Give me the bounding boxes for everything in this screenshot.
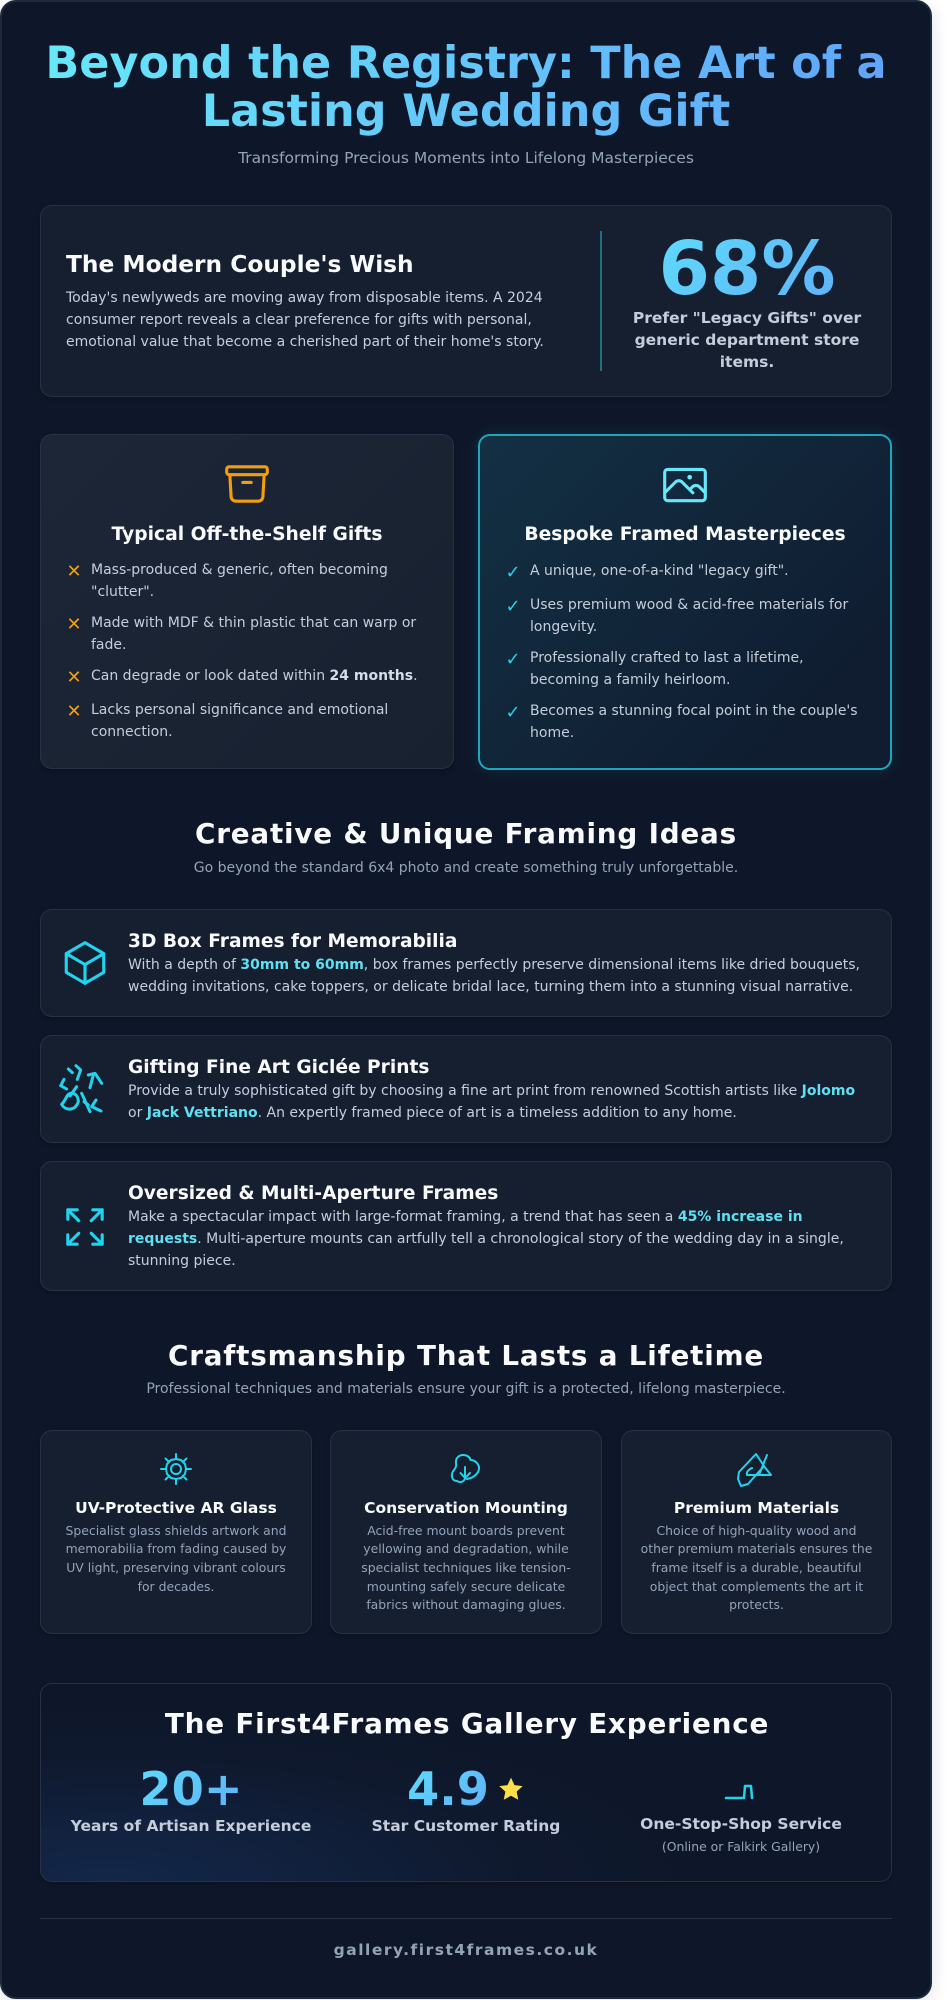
- text block: conservation mounting: [361, 1522, 571, 1612]
- heading: gallery experience: The First4Frames Gallery Experience: [165, 1707, 769, 1740]
- item: connection.: [91, 724, 173, 740]
- item: Becomes a stunning focal point in the couple's: [530, 703, 858, 719]
- icon: expand arrows: [66, 1208, 104, 1246]
- text block: 3D box frames: [128, 957, 860, 995]
- stat label: rating: Star Customer Rating: [372, 1817, 560, 1835]
- panel: fine art prints: [40, 1035, 892, 1143]
- item: [530, 650, 804, 688]
- item: Professionally crafted to last a lifetime,: [530, 650, 804, 666]
- stat: years: 20+: [139, 1762, 243, 1816]
- subheading: framing ideas: Go beyond the standard 6x4 photo and create something truly unforgettable.: [194, 860, 738, 876]
- stat sublabel: service: (Online or Falkirk Gallery): [662, 1838, 820, 1854]
- icon: sun: [160, 1453, 192, 1485]
- text block: fine art prints: [128, 1083, 855, 1121]
- text block: UV glass: Specialist glass shields artwork and: [66, 1522, 286, 1538]
- stat: rating: 4.9: [407, 1762, 489, 1816]
- icon: pencil: [737, 1453, 772, 1487]
- heading: bespoke: Bespoke Framed Masterpieces: [524, 524, 846, 545]
- heading: oversized frames: Oversized & Multi-Aperture Frames: [128, 1183, 498, 1204]
- icon: cloud with arrow: [450, 1454, 480, 1483]
- heading: UV glass: UV-Protective AR Glass: [75, 1498, 277, 1516]
- icon: star: [499, 1778, 523, 1800]
- panel: typical off-the-shelf gifts: [40, 434, 454, 769]
- marker: ✕: [66, 667, 82, 688]
- text block: premium materials: protects.: [729, 1597, 784, 1612]
- icon: framed picture: [663, 468, 707, 502]
- list: typical gift drawbacks: [66, 561, 418, 740]
- text block: UV glass: UV light, preserving vibrant colours: [66, 1560, 286, 1575]
- panel: UV glass: [40, 1430, 312, 1634]
- heading: premium materials: Premium Materials: [674, 1498, 839, 1516]
- panel: conservation mounting: [330, 1430, 602, 1634]
- marker: ✕: [66, 561, 82, 582]
- text block: conservation mounting: mounting safely secure delicate: [367, 1579, 565, 1594]
- stat label: legacy gifts: items.: [720, 352, 774, 370]
- text block: fine art prints: Provide a truly sophisticated gift by choosing a fine art print from renowned Scottish artists like Jolomo: [128, 1083, 855, 1099]
- item: longevity.: [530, 619, 597, 635]
- stat label: legacy gifts: Prefer "Legacy Gifts" over: [633, 308, 861, 326]
- stat label: legacy gifts: generic department store: [635, 330, 859, 348]
- panel: oversized frames: [40, 1161, 892, 1291]
- panel: premium materials: [621, 1430, 892, 1634]
- marker: ✕: [66, 614, 82, 635]
- item: [91, 702, 388, 740]
- item: Made with MDF & thin plastic that can warp or: [91, 615, 416, 631]
- text block: conservation mounting: yellowing and degradation, while: [363, 1541, 569, 1556]
- list: bespoke benefits: [505, 562, 858, 741]
- text block: conservation mounting: specialist techniques like tension-: [361, 1560, 571, 1575]
- panel: modern couple's wish: [40, 205, 892, 397]
- item: [530, 597, 848, 635]
- panel: gallery experience: [40, 1683, 892, 1882]
- marker: ✓: [505, 596, 521, 617]
- heading: fine art prints: Gifting Fine Art Giclée Prints: [128, 1057, 429, 1078]
- text block: oversized frames: [128, 1209, 844, 1269]
- heading: conservation mounting: Conservation Mounting: [364, 1498, 568, 1516]
- text block: UV glass: memorabilia from fading caused by: [66, 1541, 286, 1556]
- footer url: gallery.first4frames.co.uk: [334, 1940, 598, 1958]
- text block: oversized frames: Make a spectacular impact with large-format framing, a trend that has seen a 45% increase in: [128, 1209, 803, 1225]
- marker: ✓: [505, 649, 521, 670]
- text block: premium materials: other premium materials ensures the: [641, 1541, 872, 1556]
- stat label: years: Years of Artisan Experience: [71, 1817, 311, 1835]
- marker: ✓: [505, 562, 521, 583]
- marker: ✓: [505, 702, 521, 723]
- title: Beyond the Registry: The Art of a: [45, 38, 887, 89]
- item: Lacks personal significance and emotional: [91, 702, 388, 718]
- text block: premium materials: frame itself is a durable, beautiful: [651, 1560, 862, 1575]
- item: [91, 615, 416, 653]
- marker: ✕: [66, 701, 82, 722]
- icon: cube: [64, 941, 106, 985]
- heading: typical gifts: Typical Off-the-Shelf Gifts: [112, 524, 382, 545]
- text block: oversized frames: stunning piece.: [128, 1253, 236, 1269]
- divider: [600, 231, 602, 371]
- heading: framing ideas: Creative & Unique Framing Ideas: [195, 817, 737, 850]
- text block: oversized frames: requests. Multi-aperture mounts can artfully tell a chronological story of the wedding day in a single,: [128, 1231, 844, 1247]
- text block: UV glass: for decades.: [138, 1579, 214, 1594]
- item: [530, 703, 858, 741]
- text block: 3D box frames: wedding invitations, cake toppers, or delicate bridal lace, turning them into a stunning visual narrative.: [128, 979, 853, 995]
- icon: sparkling strokes: [59, 1064, 104, 1114]
- item: becoming a family heirloom.: [530, 672, 730, 688]
- text block: conservation mounting: Acid-free mount boards prevent: [367, 1522, 565, 1538]
- panel: 3D box frames: [40, 909, 892, 1017]
- icon: archive box: [225, 465, 269, 503]
- title: [40, 40, 892, 136]
- text block: conservation mounting: fabrics without damaging glues.: [366, 1597, 566, 1612]
- stat label: service: One-Stop-Shop Service: [640, 1814, 842, 1832]
- stat: 68 percent: 68%: [658, 226, 836, 312]
- text block: 3D box frames: With a depth of 30mm to 60mm, box frames perfectly preserve dimensional items like dried bouquets,: [128, 957, 860, 973]
- title: Lasting Wedding Gift: [202, 86, 730, 137]
- text block: premium materials: object that complements the art it: [650, 1579, 863, 1594]
- item: Mass-produced & generic, often becoming: [91, 562, 388, 578]
- text block: wish description: consumer report reveals a clear preference for gifts with personal,: [66, 312, 532, 328]
- text block: fine art prints: or Jack Vettriano. An expertly framed piece of art is a timeless addition to any home.: [128, 1105, 737, 1121]
- panel: bespoke framed masterpieces: [478, 434, 892, 770]
- icon: service: [724, 1784, 754, 1800]
- subtitle: Transforming Precious Moments into Lifelong Masterpieces: [238, 148, 694, 166]
- item: fade.: [91, 637, 126, 653]
- heading: craftsmanship: Craftsmanship That Lasts a Lifetime: [168, 1338, 764, 1372]
- item: Uses premium wood & acid-free materials for: [530, 597, 848, 613]
- subheading: craftsmanship: Professional techniques and materials ensure your gift is a protected, lifelong masterpiece.: [146, 1381, 786, 1397]
- item: [91, 562, 388, 600]
- text block: wish description: [66, 290, 544, 350]
- stat label: legacy gifts: [633, 308, 862, 370]
- item: home.: [530, 725, 574, 741]
- text block: UV glass: [66, 1522, 286, 1594]
- text block: wish description: Today's newlyweds are moving away from disposable items. A 2024: [66, 290, 543, 306]
- item: "clutter".: [91, 584, 154, 600]
- text block: premium materials: [641, 1522, 872, 1612]
- footer rule: [40, 1918, 892, 1919]
- item: A unique, one-of-a-kind "legacy gift".: [530, 563, 789, 579]
- heading: 3D box frames: 3D Box Frames for Memorabilia: [128, 931, 457, 952]
- item: Can degrade or look dated within 24 months.: [91, 668, 418, 684]
- text block: wish description: emotional value that become a cherished part of their home's story.: [66, 334, 544, 350]
- heading: wish: The Modern Couple's Wish: [66, 250, 414, 278]
- text block: premium materials: Choice of high-quality wood and: [656, 1522, 857, 1538]
